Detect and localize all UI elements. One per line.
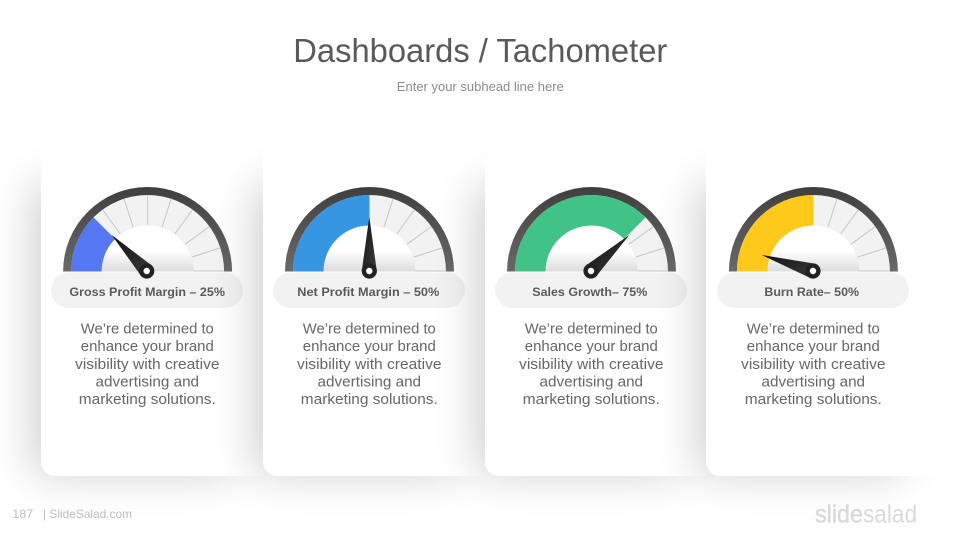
description: [519, 320, 664, 408]
needle: [583, 235, 629, 279]
description: marketing solutions.: [523, 391, 660, 408]
gauge: 50%: [285, 187, 454, 272]
label pill: [717, 272, 909, 308]
description: enhance your brand: [747, 338, 880, 355]
label: Net Profit Margin – 50%: [297, 285, 439, 299]
panel: burn rate: [698, 115, 960, 476]
subhead: Enter your subhead line here: [397, 79, 564, 94]
description: We’re determined to: [525, 320, 658, 338]
description: visibility with creative: [741, 356, 886, 373]
description: advertising and: [318, 374, 421, 390]
footer: page number: 187: [12, 507, 34, 521]
logo: [815, 500, 917, 528]
label pill: [51, 272, 243, 308]
description: advertising and: [96, 374, 199, 390]
footer: site name: | SlideSalad.com: [43, 507, 132, 521]
title: Dashboards / Tachometer: [293, 32, 667, 69]
description: visibility with creative: [297, 356, 442, 373]
logo: salad: [863, 500, 917, 528]
description: We’re determined to: [303, 320, 436, 338]
description: visibility with creative: [519, 356, 664, 373]
description: We’re determined to: [747, 320, 880, 338]
description: marketing solutions.: [745, 391, 882, 408]
description: marketing solutions.: [79, 391, 216, 408]
logo: slide: [815, 500, 863, 528]
description: enhance your brand: [525, 338, 658, 355]
needle: [112, 235, 154, 279]
description: advertising and: [762, 374, 865, 390]
description: advertising and: [540, 374, 643, 390]
description: enhance your brand: [303, 338, 436, 355]
description: [741, 320, 886, 408]
label pill: [273, 272, 465, 308]
needle: [362, 217, 377, 279]
panel: net profit margin: [255, 115, 498, 476]
gauge: 25%: [63, 187, 232, 272]
needle: [762, 255, 821, 279]
panel: gross profit margin: [33, 115, 276, 476]
gauge: 50%: [729, 187, 898, 272]
description: [297, 320, 442, 408]
label: Sales Growth– 75%: [532, 285, 647, 299]
description: marketing solutions.: [301, 391, 438, 408]
description: We’re determined to: [81, 320, 214, 338]
description: [75, 320, 220, 408]
label pill: [495, 272, 687, 308]
gauge: 75%: [507, 187, 676, 272]
description: enhance your brand: [81, 338, 214, 355]
panel: sales growth: [477, 115, 720, 476]
label: Gross Profit Margin – 25%: [69, 285, 225, 299]
description: visibility with creative: [75, 356, 220, 373]
label: Burn Rate– 50%: [764, 285, 859, 299]
